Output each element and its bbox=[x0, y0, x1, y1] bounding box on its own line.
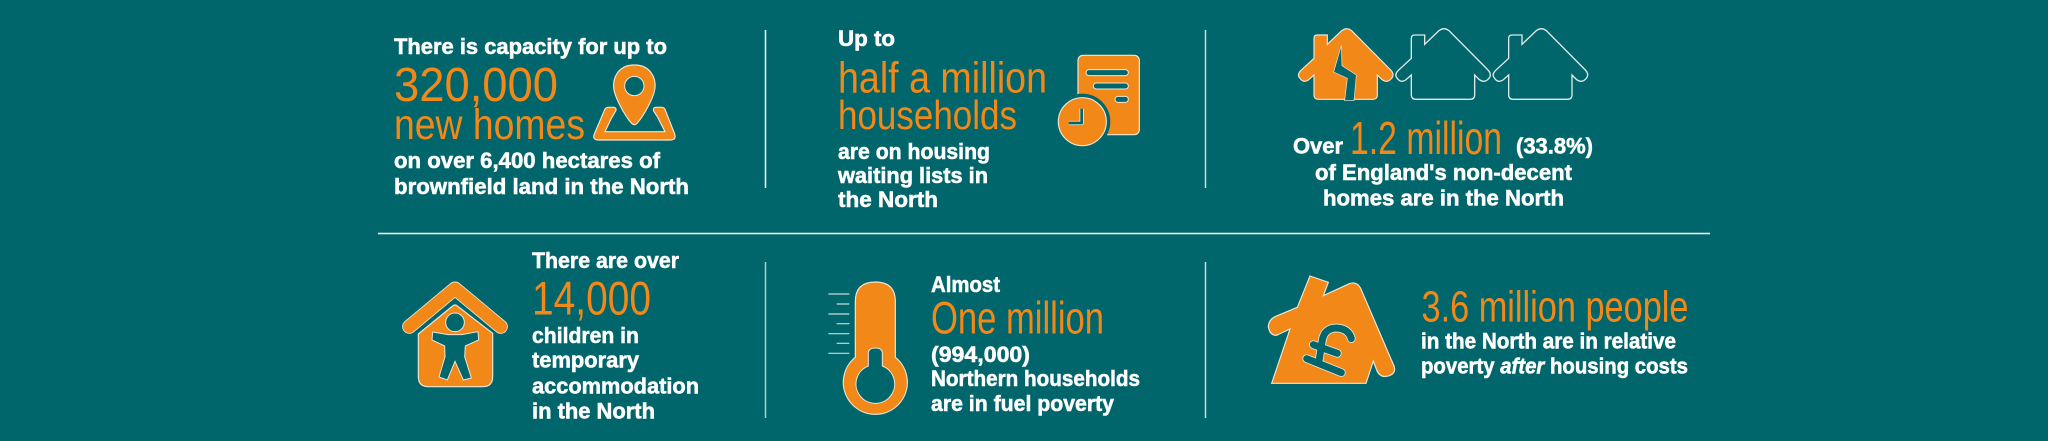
text: almost: Almost bbox=[931, 272, 1001, 297]
text: there are over: There are over bbox=[532, 248, 679, 273]
text: accommodation: accommodation bbox=[532, 374, 699, 398]
text: Northern households: Northern households bbox=[931, 366, 1140, 391]
icon: outline house one bbox=[1396, 29, 1490, 99]
text: hectares line: on over 6,400 hectares of bbox=[394, 148, 661, 173]
icon: thermometer bbox=[828, 282, 907, 414]
text: up to: Up to bbox=[838, 26, 895, 51]
text: poverty after housing costs: poverty after housing costs bbox=[1421, 354, 1688, 378]
icon: cracked house bbox=[1298, 29, 1393, 101]
text: England's non-decent: of England's non-decent bbox=[1315, 160, 1573, 185]
stat: one million: One million bbox=[931, 292, 1104, 344]
stat: 320,000: 320,000 bbox=[394, 59, 558, 112]
text: are in fuel poverty: are in fuel poverty bbox=[931, 391, 1115, 416]
panel: waiting lists bbox=[837, 26, 1139, 212]
text: waiting lists in: waiting lists in bbox=[837, 163, 988, 188]
panel: temporary accommodation bbox=[409, 248, 699, 424]
text: brownfield line: brownfield land in the North bbox=[394, 174, 689, 199]
icon: tilted house with pound sign bbox=[1268, 276, 1395, 383]
panel: brownfield capacity bbox=[394, 34, 689, 199]
text: percentage: (33.8%) bbox=[1516, 134, 1593, 158]
text: are on housing: are on housing bbox=[838, 139, 990, 164]
stat: 3.6 million people: 3.6 million people bbox=[1422, 282, 1688, 332]
panel: relative poverty bbox=[1268, 276, 1688, 383]
text: capacity intro: There is capacity for up to bbox=[394, 34, 667, 59]
icon: map pin on plot bbox=[594, 65, 675, 140]
stat: half a million: half a million bbox=[838, 54, 1047, 102]
stat: new homes: new homes bbox=[394, 101, 585, 149]
icon: outline house two bbox=[1493, 29, 1588, 99]
panel: fuel poverty bbox=[828, 272, 1140, 416]
icon: child in house bbox=[409, 289, 501, 387]
text: children in: children in bbox=[532, 323, 639, 348]
stat: 14,000: 14,000 bbox=[532, 272, 651, 324]
icon: document with clock bbox=[1054, 55, 1139, 150]
stat: 1.2 million: 1.2 million bbox=[1350, 112, 1502, 164]
text: homes in the North: homes are in the North bbox=[1323, 186, 1564, 210]
panel: non-decent homes bbox=[1293, 29, 1593, 211]
text: 994,000: (994,000) bbox=[931, 342, 1030, 367]
stat: households: households bbox=[838, 92, 1017, 138]
text: in the North relative: in the North are in relative bbox=[1421, 328, 1676, 354]
text: over: Over bbox=[1293, 134, 1343, 158]
text: the North: the North bbox=[838, 187, 938, 212]
text: in the North: in the North bbox=[532, 398, 655, 424]
text: temporary: temporary bbox=[532, 348, 640, 372]
